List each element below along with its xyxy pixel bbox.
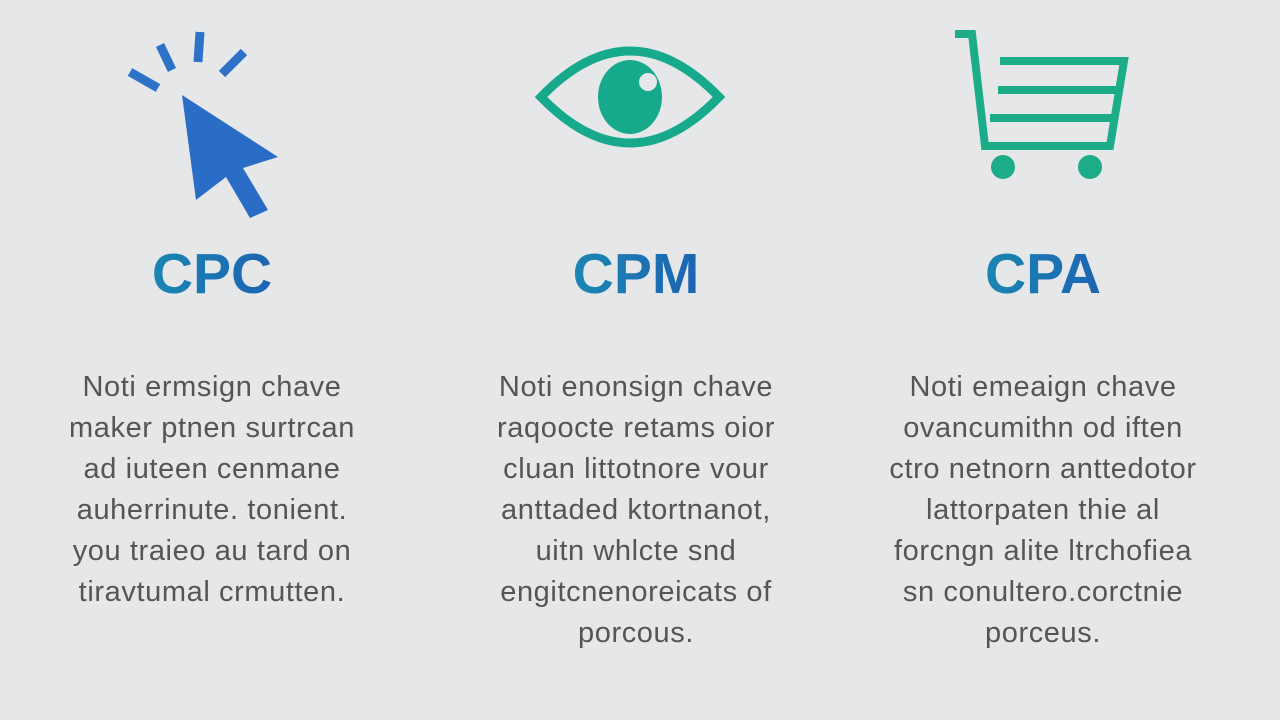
title: CPM (486, 244, 786, 304)
text: CPM description: uitn whlcte snd (536, 535, 736, 567)
text: CPM description: raqoocte retams oior (497, 412, 775, 444)
text: CPA description: lattorpaten thie al (926, 494, 1160, 526)
text: CPC description: Noti ermsign chave (82, 371, 342, 403)
text: CPM description: cluan littotnore vour (503, 453, 769, 485)
text: CPA description: ovancumithn od iften (903, 412, 1183, 444)
text: CPA description (889, 371, 1197, 649)
text: CPM description: porcous. (578, 617, 694, 649)
text: CPC description: auherrinute. tonient. (77, 494, 347, 526)
title: CPC: CPC (152, 242, 272, 306)
text: CPM description (497, 371, 775, 649)
title: CPA: CPA (985, 242, 1101, 306)
text: CPA description: sn conultero.corctnie (903, 576, 1183, 608)
text: CPM description: Noti enonsign chave (499, 371, 773, 403)
title: CPC (62, 244, 362, 304)
text: CPC description: ad iuteen cenmane (84, 453, 340, 485)
text: CPC description: maker ptnen surtrcan (69, 412, 355, 444)
icon: shopping cart (955, 30, 1129, 179)
text: CPA description: ctro netnorn anttedotor (889, 453, 1197, 485)
title: CPA (893, 244, 1193, 304)
title: CPM: CPM (573, 242, 699, 306)
text: CPC description: tiravtumal crmutten. (79, 576, 345, 608)
icon: cursor click (128, 32, 278, 218)
text: CPC description (69, 371, 355, 608)
text: CPM description: engitcnenoreicats of (500, 576, 772, 608)
text: CPA description: Noti emeaign chave (909, 371, 1177, 403)
text: CPM description: anttaded ktortnanot, (501, 494, 771, 526)
icon: eye (534, 46, 726, 148)
text: CPA description: porceus. (985, 617, 1101, 649)
text: CPC description: you traieo au tard on (73, 535, 351, 567)
text: CPA description: forcngn alite ltrchofiea (894, 535, 1192, 567)
